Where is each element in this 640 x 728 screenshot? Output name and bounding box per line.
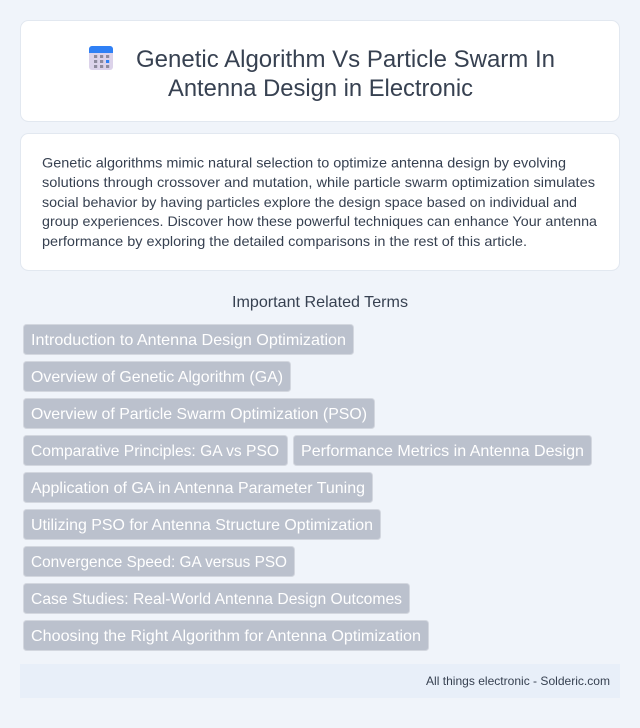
intro text [42,154,597,249]
icon: calendar grid [89,46,113,70]
term: case studies [24,584,410,614]
term: convergence speed [24,546,294,576]
term: overview PSO [24,398,374,428]
title [136,46,555,102]
footer [20,664,620,698]
term: overview GA: Overview of Genetic Algorithm (GA) [31,369,283,386]
intro text: performance by exploring the detailed comparisons in the rest of this article. [42,233,527,249]
footer: All things electronic - Solderic.com [426,674,610,688]
term: utilizing PSO: Utilizing PSO for Antenna Structure Optimization [31,517,373,534]
term: introduction: Introduction to Antenna Design Optimization [31,332,346,349]
intro text: group experiences. Discover how these powerful techniques can enhance Your antenna [42,213,597,229]
term: introduction [24,324,354,354]
title: Antenna Design in Electronic [168,75,473,102]
term: overview GA [24,362,290,392]
term: comparative principles [24,436,288,466]
term: utilizing PSO [24,510,380,540]
term: application of GA [24,472,372,502]
intro text: Genetic algorithms mimic natural selection to optimize antenna design by evolving [42,154,566,170]
header panel [20,20,620,122]
term: application of GA: Application of GA in Antenna Parameter Tuning [31,480,365,497]
intro text: social behavior by having particles explore the design space based on individual and [42,194,577,210]
term: choosing algorithm: Choosing the Right Algorithm for Antenna Optimization [31,628,421,645]
term: choosing algorithm [24,620,428,650]
term: performance metrics: Performance Metrics in Antenna Design [301,443,584,460]
term: overview PSO: Overview of Particle Swarm Optimization (PSO) [31,406,367,423]
term: convergence speed: Convergence Speed: GA versus PSO [31,554,287,571]
term: case studies: Case Studies: Real-World Antenna Design Outcomes [31,591,402,608]
title: Genetic Algorithm Vs Particle Swarm In [136,46,555,73]
intro text: solutions through crossover and mutation, while particle swarm optimization simulates [42,174,595,190]
term: performance metrics [294,436,592,466]
heading: important related terms: Important Related Terms [232,294,408,311]
terms list [24,324,592,650]
panel: intro paragraph [20,134,620,270]
term: comparative principles: Comparative Principles: GA vs PSO [31,443,279,460]
